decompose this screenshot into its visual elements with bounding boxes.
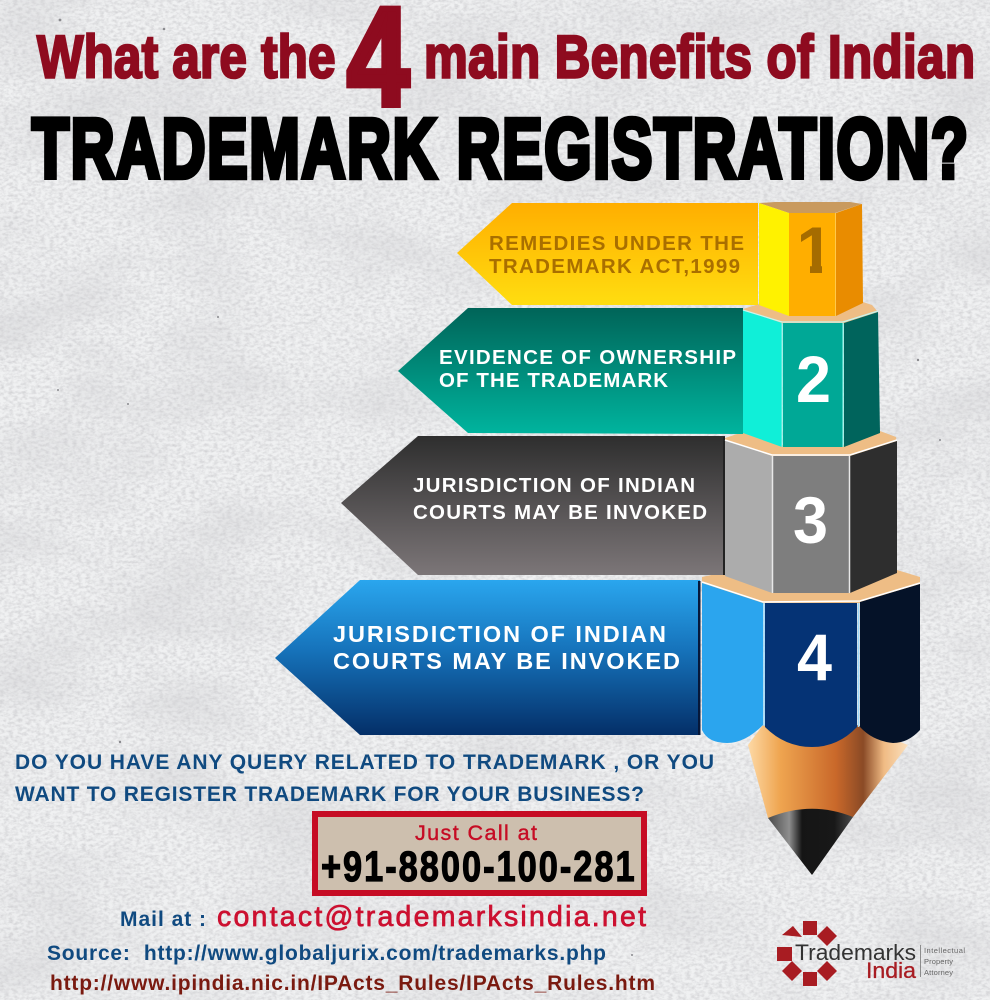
logo bbox=[777, 921, 965, 986]
tier 4 pencil segment bbox=[702, 570, 920, 747]
phone number: +91-8800-100-281 bbox=[321, 843, 635, 891]
pencil tip bbox=[748, 725, 908, 875]
logo wordmark: Trademarks bbox=[795, 940, 916, 965]
tier 2 ribbon bbox=[398, 308, 743, 434]
tier 2 pencil segment bbox=[743, 302, 880, 447]
tier 3 label: COURTS MAY BE INVOKED bbox=[413, 501, 707, 524]
title line one, red bbox=[37, 0, 975, 135]
sources: http://www.ipindia.nic.in/IPActs_Rules/IPActs_Rules.htm bbox=[50, 972, 655, 995]
logo emblem bbox=[777, 921, 837, 986]
query text: DO YOU HAVE ANY QUERY RELATED TO TRADEMARK , OR YOU bbox=[15, 751, 714, 774]
tier 3 number: 3 bbox=[793, 483, 828, 557]
logo: India bbox=[866, 958, 917, 983]
tier 3 label: JURISDICTION OF INDIAN bbox=[413, 474, 695, 497]
logo tagline: Property bbox=[924, 957, 953, 966]
query text bbox=[15, 751, 714, 806]
tier 2 bbox=[398, 302, 880, 447]
contact email: contact@trademarksindia.net bbox=[217, 901, 646, 933]
tier 3 ribbon bbox=[341, 436, 725, 575]
tier 2 label: OF THE TRADEMARK bbox=[439, 369, 668, 392]
title line one, red: What are the bbox=[37, 23, 335, 91]
tier 4 label bbox=[333, 621, 680, 674]
call label: Just Call at bbox=[415, 821, 537, 845]
tier 4 bbox=[275, 570, 920, 747]
tier 1 bbox=[457, 202, 863, 316]
tier 4 number: 4 bbox=[797, 620, 832, 694]
sources: Source: http://www.globaljurix.com/trademarks.php bbox=[47, 942, 606, 965]
tier 4 label: COURTS MAY BE INVOKED bbox=[333, 648, 680, 674]
call box bbox=[315, 814, 644, 893]
title line one, red: main Benefits of Indian bbox=[424, 23, 975, 91]
tier 4 label: JURISDICTION OF INDIAN bbox=[333, 621, 666, 647]
graphite lead bbox=[768, 809, 853, 875]
query text: WANT TO REGISTER TRADEMARK FOR YOUR BUSINESS? bbox=[15, 783, 644, 806]
logo tagline bbox=[924, 946, 965, 977]
title bbox=[32, 0, 975, 196]
tier 1 number: 1 bbox=[796, 213, 833, 287]
tier 3 label bbox=[413, 474, 707, 524]
tier 1 pencil segment bbox=[759, 202, 863, 316]
sources bbox=[47, 942, 655, 995]
wood cone bbox=[748, 725, 908, 818]
tier 4 ribbon bbox=[275, 580, 700, 735]
tier 1 label: TRADEMARK ACT,1999 bbox=[489, 255, 740, 278]
tier 2 label: EVIDENCE OF OWNERSHIP bbox=[439, 346, 736, 369]
tier 3 bbox=[341, 431, 897, 593]
tier 1 ribbon bbox=[457, 203, 758, 305]
tier 3 pencil segment bbox=[725, 431, 897, 593]
tier 1 label bbox=[489, 232, 744, 278]
tier 2 number: 2 bbox=[796, 342, 831, 416]
logo tagline: Intellectual bbox=[924, 946, 965, 955]
tier 1 label: REMEDIES UNDER THE bbox=[489, 232, 744, 255]
title line two, black: TRADEMARK REGISTRATION? bbox=[32, 102, 968, 196]
contact email: Mail at : bbox=[120, 908, 206, 931]
tier 2 label bbox=[439, 346, 736, 392]
logo tagline: Attorney bbox=[924, 968, 953, 977]
